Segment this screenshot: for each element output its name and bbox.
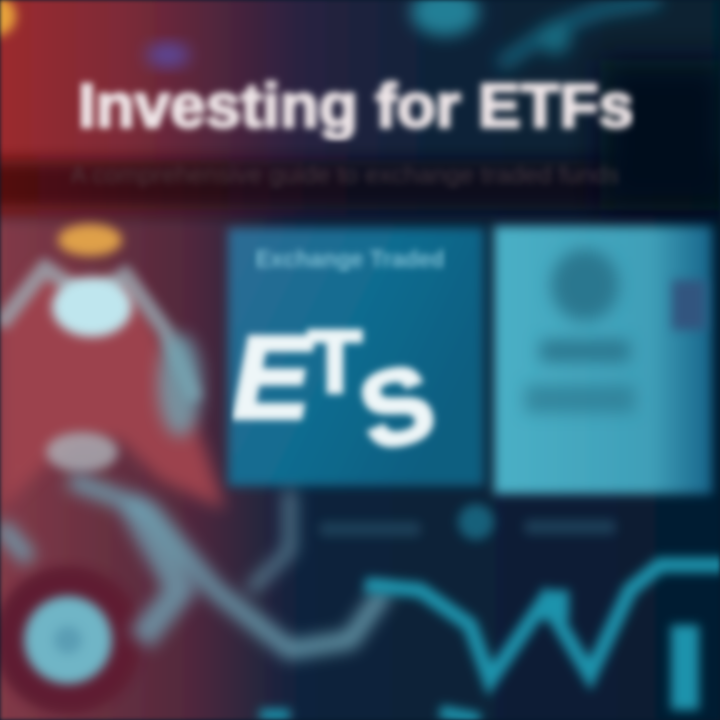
card big letters: T (308, 312, 362, 411)
lower labels (320, 504, 615, 540)
icon: orange coin corner (0, 0, 16, 36)
left chart peaks (0, 224, 225, 510)
line chart: left network (0, 480, 385, 650)
icon: purple glow (146, 43, 190, 67)
card heading: Exchange Traded (255, 246, 445, 273)
title: Investing for ETFs (78, 72, 634, 141)
subtitle: A comprehensive guide to exchange traded funds (70, 162, 620, 189)
icon: gear (0, 566, 142, 714)
card big letters: E (232, 312, 314, 444)
panel: ETF card (228, 228, 484, 486)
card big letters (232, 312, 445, 473)
icon: orange highlight (58, 224, 122, 256)
document detail (525, 249, 635, 413)
icon: pale cyan block (52, 277, 132, 337)
side accent (672, 280, 706, 330)
card big letters: S (348, 342, 445, 473)
panel: document card (494, 226, 712, 494)
decorative network top right (411, 0, 660, 65)
line chart: right trend (260, 565, 720, 720)
